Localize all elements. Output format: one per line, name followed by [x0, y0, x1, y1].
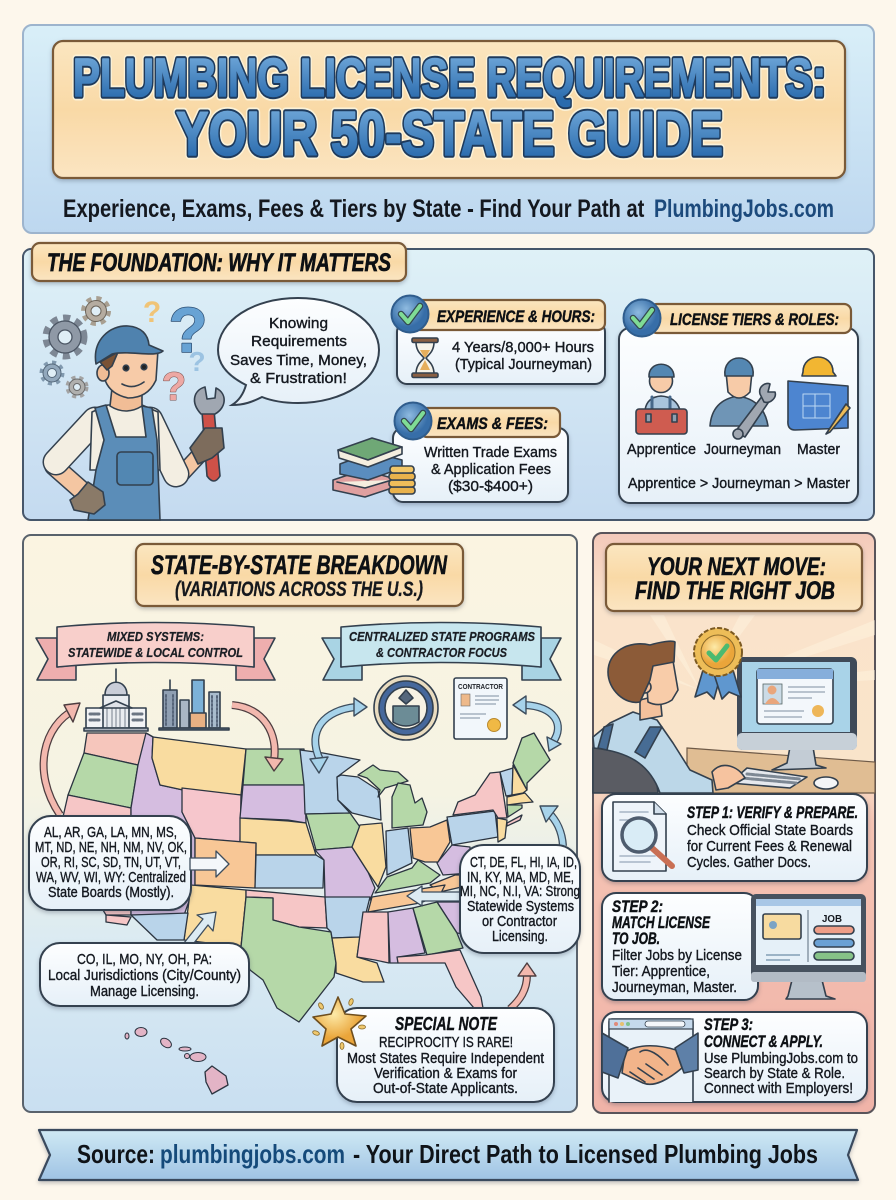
icon: state seal	[374, 676, 438, 740]
panel: state-by-state breakdown	[23, 535, 580, 1112]
card: license tiers and roles	[619, 300, 858, 503]
card: step 2	[602, 893, 758, 1000]
heading: state-by-state: STATE-BY-STATE BREAKDOWN	[151, 550, 447, 580]
card: exams and fees: ($30-$400+)	[448, 478, 533, 495]
card: exams and fees: Written Trade Exams	[424, 444, 557, 461]
illustration: job seeker	[593, 641, 745, 793]
card: step 3	[602, 1012, 867, 1102]
card: license tiers and roles: Apprentice > Journeyman > Master	[628, 475, 850, 492]
arrow: west callout to map	[190, 851, 229, 877]
card: license tiers and roles: Apprentice	[627, 441, 696, 458]
card: experience and hours	[392, 296, 605, 384]
callout: special note: RECIPROCITY IS RARE!	[379, 1034, 513, 1051]
icon: master blueprint	[788, 357, 850, 434]
panel: the foundation	[23, 243, 874, 520]
plumber neck and head	[110, 388, 142, 411]
footer source ribbon: plumbingjobs.com	[160, 1139, 345, 1169]
arrow: east callout to map	[407, 886, 462, 906]
heading: state-by-state	[136, 544, 463, 606]
wrench	[202, 410, 220, 481]
callout: special note	[337, 1008, 554, 1102]
icon: browser with handshake	[602, 1019, 698, 1102]
card: step 1: Cycles. Gather Docs.	[687, 854, 811, 871]
speech bubble: Requirements	[251, 333, 347, 350]
title: YOUR 50-STATE GUIDE	[176, 100, 723, 169]
header: exams and fees	[420, 408, 560, 437]
icon: contractor certificate	[454, 678, 507, 739]
icon: checkmark	[392, 296, 428, 332]
icon: job monitor: JOB	[822, 913, 842, 925]
plumber right forearm	[178, 450, 204, 478]
card: step 2: Tier: Apprentice,	[612, 963, 710, 980]
heading: your next move	[606, 544, 862, 611]
card: exams and fees: & Application Fees	[431, 461, 551, 478]
heading: the foundation: THE FOUNDATION: WHY IT MATTERS	[47, 249, 391, 277]
icon: journeyman	[710, 358, 775, 439]
arrow: blue right	[513, 696, 561, 751]
title: YOUR 50-STATE GUIDE	[176, 100, 723, 169]
heading: state-by-state: (VARIATIONS ACROSS THE U.S.)	[175, 578, 423, 601]
card: step 3: CONNECT & APPLY.	[704, 1033, 823, 1051]
callout: centralized state boards: WA, WV, WI, WY: Centralized	[36, 869, 186, 886]
icon: checkmark	[624, 300, 660, 336]
callout: strong statewide systems	[460, 845, 580, 953]
plumber gloves	[70, 482, 105, 514]
illustration: keyboard and mouse	[730, 768, 838, 789]
icon: checkmark	[394, 402, 432, 440]
icon: apprentice	[636, 364, 687, 434]
callout: centralized state boards: MT, ND, NE, NH, NM, NV, OK,	[35, 839, 187, 856]
card: step 2: TO JOB.	[612, 930, 660, 948]
callout: special note: Most States Require Independent	[347, 1050, 545, 1067]
arrow: blue left	[310, 698, 367, 773]
icon: capitol building	[84, 669, 148, 731]
ribbon: mixed systems: MIXED SYSTEMS:	[107, 629, 204, 644]
header: license tiers	[650, 304, 851, 333]
plumber shirt	[90, 405, 160, 470]
callout: centralized state boards	[29, 816, 191, 910]
arrow: pink right	[232, 705, 283, 771]
icon: hourglass	[412, 338, 438, 378]
header: experience and hours	[412, 300, 605, 330]
callout: centralized state boards: AL, AR, GA, LA, MN, MS,	[44, 824, 177, 841]
card: experience and hours: (Typical Journeyman)	[455, 356, 592, 373]
arrow: blue to new england	[540, 806, 563, 846]
icon: medal	[694, 628, 742, 699]
subtitle: Experience, Exams, Fees & Tiers by State - Find Your Path at	[63, 195, 650, 223]
callout: strong statewide systems: MI, NC, N.I, VA: Strong	[460, 883, 580, 900]
icon: question marks: ?	[143, 296, 161, 329]
heading: the foundation	[32, 243, 406, 281]
callout: special note: Out-of-State Applicants.	[373, 1080, 518, 1097]
icon: gears	[42, 298, 108, 396]
plumber overalls	[88, 405, 160, 520]
panel: your next move	[593, 533, 875, 1113]
callout: strong statewide systems: Licensing.	[492, 928, 548, 945]
icon: question marks: ?	[188, 346, 206, 377]
speech bubble: Saves Time, Money,	[230, 352, 367, 369]
callout: centralized state boards: State Boards (Mostly).	[48, 884, 174, 901]
speech bubble: & Frustration!	[250, 370, 347, 387]
plumber sleeves	[56, 420, 176, 474]
card: step 2: MATCH LICENSE	[612, 914, 711, 932]
card: license tiers and roles: Master	[797, 441, 840, 458]
heading: your next move: YOUR NEXT MOVE:	[647, 553, 826, 581]
callout: strong statewide systems: IN, KY, MA, MD, ME,	[467, 869, 574, 886]
callout: local jurisdictions: Local Jurisdictions (City/County)	[48, 967, 241, 984]
card: exams and fees	[333, 402, 568, 502]
card: step 1: Check Official State Boards	[687, 822, 853, 839]
icon: contractor certificate: CONTRACTOR	[458, 682, 503, 691]
card: step 2: STEP 2:	[612, 898, 663, 916]
map of the United States	[60, 733, 550, 1022]
icon: job monitor	[751, 894, 866, 999]
card: experience and hours: 4 Years/8,000+ Hours	[452, 339, 594, 356]
heading: your next move: FIND THE RIGHT JOB	[635, 577, 835, 605]
ribbon: centralized programs: & CONTRACTOR FOCUS	[376, 645, 507, 660]
arrow: local callout to map	[184, 912, 216, 943]
callout: special note: Verification & Exams for	[374, 1065, 517, 1082]
plumber illustration	[54, 326, 224, 520]
callout: local jurisdictions: Manage Licensing.	[90, 983, 199, 1000]
illustration: desk	[687, 748, 875, 793]
ribbon: centralized programs	[322, 622, 561, 680]
card: step 2: Filter Jobs by License	[612, 947, 742, 964]
plumber cap	[95, 326, 163, 364]
card: step 3: Search by State & Role.	[704, 1065, 845, 1082]
icon: city skyline	[159, 680, 229, 730]
icon: question marks: ?	[168, 294, 208, 366]
title	[73, 48, 826, 169]
icon: star	[312, 997, 366, 1050]
card: step 3: Connect with Employers!	[704, 1080, 853, 1097]
footer source ribbon	[39, 1130, 858, 1180]
plumber left forearm	[54, 466, 88, 496]
card: step 1	[602, 794, 867, 881]
callout: centralized state boards: OR, RI, SC, SD, TN, UT, VT,	[41, 854, 181, 871]
callout: local jurisdictions	[40, 943, 249, 1006]
callout: strong statewide systems: CT, DE, FL, HI, IA, ID,	[470, 854, 577, 871]
title: YOUR 50-STATE GUIDE	[176, 100, 723, 169]
card: experience and hours: EXPERIENCE & HOURS:	[437, 308, 595, 326]
ribbon: centralized programs: CENTRALIZED STATE PROGRAMS	[349, 629, 535, 644]
title plate	[53, 41, 845, 178]
icon: question marks: ?	[162, 365, 186, 409]
icon: question marks	[143, 294, 208, 409]
callout: strong statewide systems: or Contractor	[482, 913, 557, 930]
speech bubble	[218, 298, 379, 405]
ribbon: mixed systems	[36, 622, 275, 680]
icon: document with magnifier	[613, 802, 672, 871]
illustration: sun rays	[594, 615, 875, 690]
ribbon: mixed systems: STATEWIDE & LOCAL CONTROL	[68, 645, 243, 660]
card: step 2: Journeyman, Master.	[612, 979, 737, 996]
speech bubble: Knowing	[269, 315, 328, 332]
header panel	[23, 25, 874, 233]
callout: strong statewide systems: Statewide Systems	[467, 898, 574, 915]
subtitle: PlumbingJobs.com	[654, 195, 834, 223]
illustration: monitor	[737, 657, 857, 770]
arrow: pink left	[44, 703, 80, 815]
callout: local jurisdictions: CO, IL, MO, NY, OH, PA:	[77, 951, 212, 968]
card: step 3: STEP 3:	[704, 1016, 753, 1034]
Hawaii islands	[125, 1028, 228, 1094]
card: license tiers and roles: Journeyman	[704, 441, 781, 458]
callout: special note: SPECIAL NOTE	[395, 1014, 498, 1034]
card: license tiers and roles: LICENSE TIERS & ROLES:	[670, 311, 839, 329]
icon: books and coins	[333, 438, 415, 497]
arrow: pink up from special note	[510, 963, 536, 1009]
card: exams and fees: EXAMS & FEES:	[437, 415, 548, 433]
footer source ribbon: Source:	[77, 1139, 155, 1169]
card: step 1: for Current Fees & Renewal	[687, 838, 852, 855]
card: step 3: Use PlumbingJobs.com to	[704, 1050, 858, 1067]
